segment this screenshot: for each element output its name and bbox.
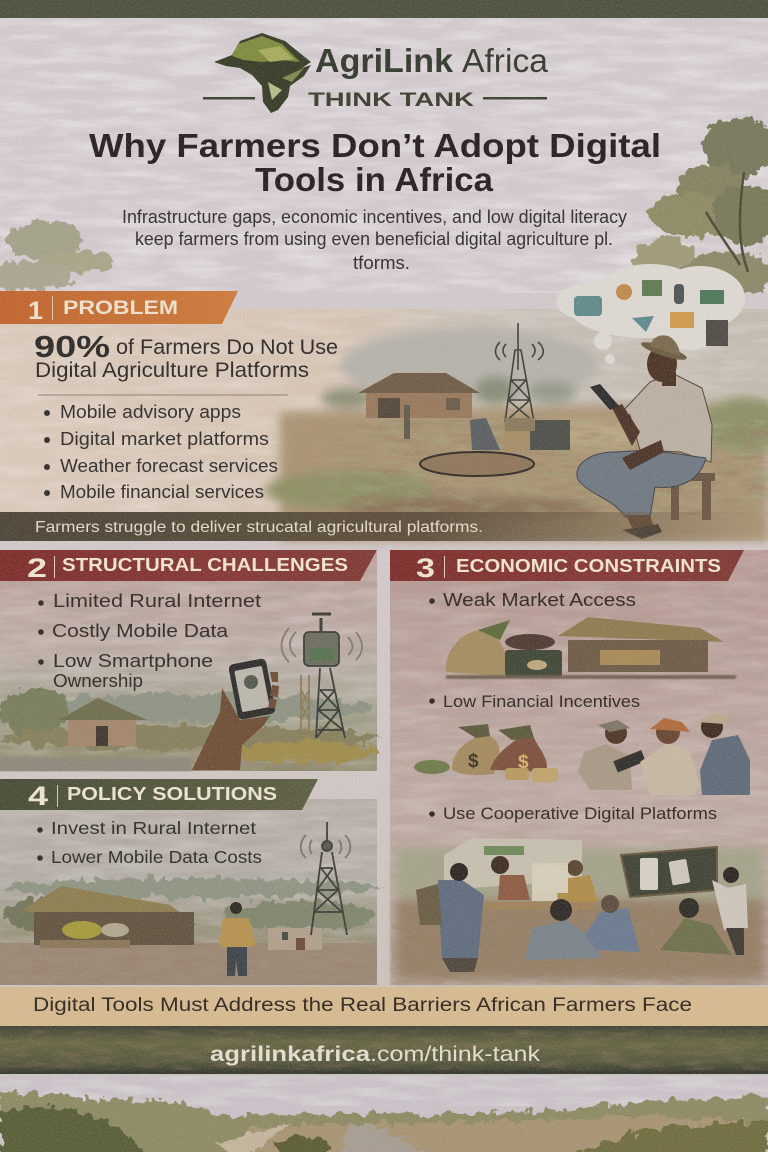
icon: seated farmer with phone bbox=[577, 335, 715, 539]
money bags scene bbox=[414, 724, 558, 782]
bottom landscape bbox=[0, 1075, 768, 1152]
icon: equipment hut bbox=[268, 928, 322, 950]
logo wordmark AgriLink Africa: Africa bbox=[462, 42, 549, 79]
icon: market barn bbox=[22, 886, 197, 948]
farmer feet and sandals bbox=[622, 515, 662, 539]
problem bullet list: Digital market platforms bbox=[60, 429, 269, 449]
title: Tools in Africa bbox=[255, 161, 494, 198]
icon: weather station tower bbox=[282, 614, 362, 738]
icon: small hut bbox=[58, 698, 147, 746]
logo subtitle THINK TANK: THINK TANK bbox=[308, 90, 474, 111]
problem headline stat: 90% bbox=[34, 329, 110, 364]
caption band bbox=[0, 512, 768, 541]
crowd of farmers bbox=[416, 856, 748, 972]
challenges bullet list: Low Smartphone bbox=[53, 651, 213, 671]
banner: problem bbox=[0, 291, 238, 325]
panel: structural challenges bbox=[0, 552, 380, 771]
caption band: Farmers struggle to deliver strucatal agricultural platforms. bbox=[35, 519, 483, 536]
challenges bullet list bbox=[38, 591, 261, 691]
policy landscape bbox=[0, 822, 380, 985]
problem landscape scene bbox=[265, 323, 768, 541]
conclusion band bbox=[0, 987, 768, 1026]
bullet: weak market access: Weak Market Access bbox=[443, 590, 636, 610]
icon: chalkboard with phones bbox=[621, 847, 717, 897]
website footer band: .com/think-tank bbox=[370, 1043, 541, 1066]
seated farmer figure bbox=[660, 918, 732, 955]
bullet: low financial incentives: Low Financial Incentives bbox=[443, 692, 640, 711]
presenter bbox=[712, 880, 748, 930]
farmer stool bbox=[665, 473, 715, 520]
banner: economic constraints: ECONOMIC CONSTRAINTS bbox=[456, 556, 721, 576]
top dark border band bbox=[0, 0, 768, 18]
conclusion band: Digital Tools Must Address the Real Barriers African Farmers Face bbox=[33, 995, 692, 1016]
panel: problem bbox=[0, 264, 768, 541]
logo wordmark AgriLink Africa bbox=[315, 42, 549, 79]
icon: cell tower bbox=[496, 323, 543, 422]
market scene bbox=[446, 617, 736, 679]
seated farmer figure bbox=[525, 920, 600, 960]
farmer forearms bbox=[612, 404, 664, 470]
problem bullet list: Weather forecast services bbox=[60, 456, 278, 476]
website footer band bbox=[0, 1026, 768, 1074]
banner: problem: 1 bbox=[28, 297, 43, 325]
farmer jeans bbox=[577, 450, 706, 517]
banner: problem: PROBLEM bbox=[63, 298, 178, 319]
money bags scene: $ bbox=[468, 751, 479, 772]
money bags scene: $ bbox=[518, 752, 529, 773]
icon: farmhouse bbox=[358, 373, 480, 439]
problem bullet list bbox=[44, 402, 278, 502]
panel: policy solutions bbox=[0, 799, 380, 985]
website footer band: agrilinkafrica bbox=[210, 1043, 370, 1066]
logo wordmark AgriLink Africa: AgriLink bbox=[315, 42, 454, 79]
subtitle text: keep farmers from using even beneficial digital agriculture pl. bbox=[135, 229, 613, 249]
icon: equipment and cable bbox=[420, 418, 570, 476]
icon: hand holding phone bbox=[192, 658, 279, 770]
logo bbox=[203, 33, 549, 113]
icon: Africa tree logo bbox=[214, 33, 311, 113]
icon: thought cloud bbox=[556, 264, 745, 364]
icon: man walking bbox=[219, 902, 256, 976]
panel: economic constraints bbox=[390, 550, 768, 985]
banner: economic constraints: 3 bbox=[416, 553, 435, 583]
cooperative scene bbox=[392, 838, 768, 985]
banner: policy solutions bbox=[0, 779, 318, 811]
policy bullet list: Lower Mobile Data Costs bbox=[51, 847, 262, 867]
bullet: use cooperative digital platforms: Use Cooperative Digital Platforms bbox=[443, 804, 717, 823]
farmer head bbox=[647, 346, 677, 386]
icon: policy tower bbox=[301, 822, 350, 935]
banner: economic constraints bbox=[390, 550, 744, 583]
background tree left bbox=[0, 220, 114, 290]
problem headline stat bbox=[34, 329, 338, 382]
title: Why Farmers Don’t Adopt Digital bbox=[89, 127, 661, 164]
farmer hat bbox=[640, 335, 688, 363]
subtitle text: Infrastructure gaps, economic incentives, and low digital literacy bbox=[122, 207, 627, 227]
problem bullet list: Mobile advisory apps bbox=[60, 402, 241, 422]
banner: policy solutions: 4 bbox=[28, 781, 48, 811]
banner: structural challenges bbox=[0, 550, 377, 583]
policy bullet list: Invest in Rural Internet bbox=[51, 818, 256, 838]
banner: policy solutions: POLICY SOLUTIONS bbox=[67, 784, 277, 804]
subtitle text bbox=[122, 207, 627, 273]
icon: kiosk truck bbox=[444, 838, 596, 910]
background tree right bbox=[633, 118, 768, 299]
challenges landscape bbox=[0, 614, 380, 771]
problem headline stat: of Farmers Do Not Use bbox=[116, 336, 338, 359]
banner: structural challenges: 2 bbox=[27, 553, 47, 583]
seated farmer figure bbox=[585, 908, 640, 952]
policy bullet list bbox=[37, 818, 262, 867]
banner: structural challenges: STRUCTURAL CHALLENGES bbox=[62, 555, 348, 575]
problem headline stat: Digital Agriculture Platforms bbox=[35, 359, 309, 382]
farmer shirt bbox=[622, 373, 712, 462]
challenges bullet list: Costly Mobile Data bbox=[52, 621, 229, 641]
challenges bullet list: Ownership bbox=[53, 671, 143, 691]
sky texture bbox=[0, 18, 768, 293]
problem bullet list: Mobile financial services bbox=[60, 482, 264, 502]
title bbox=[89, 127, 661, 198]
subtitle text: tforms. bbox=[353, 253, 410, 273]
challenges bullet list: Limited Rural Internet bbox=[53, 591, 261, 611]
farmer phone bbox=[590, 384, 619, 410]
three farmers talking bbox=[578, 713, 750, 795]
